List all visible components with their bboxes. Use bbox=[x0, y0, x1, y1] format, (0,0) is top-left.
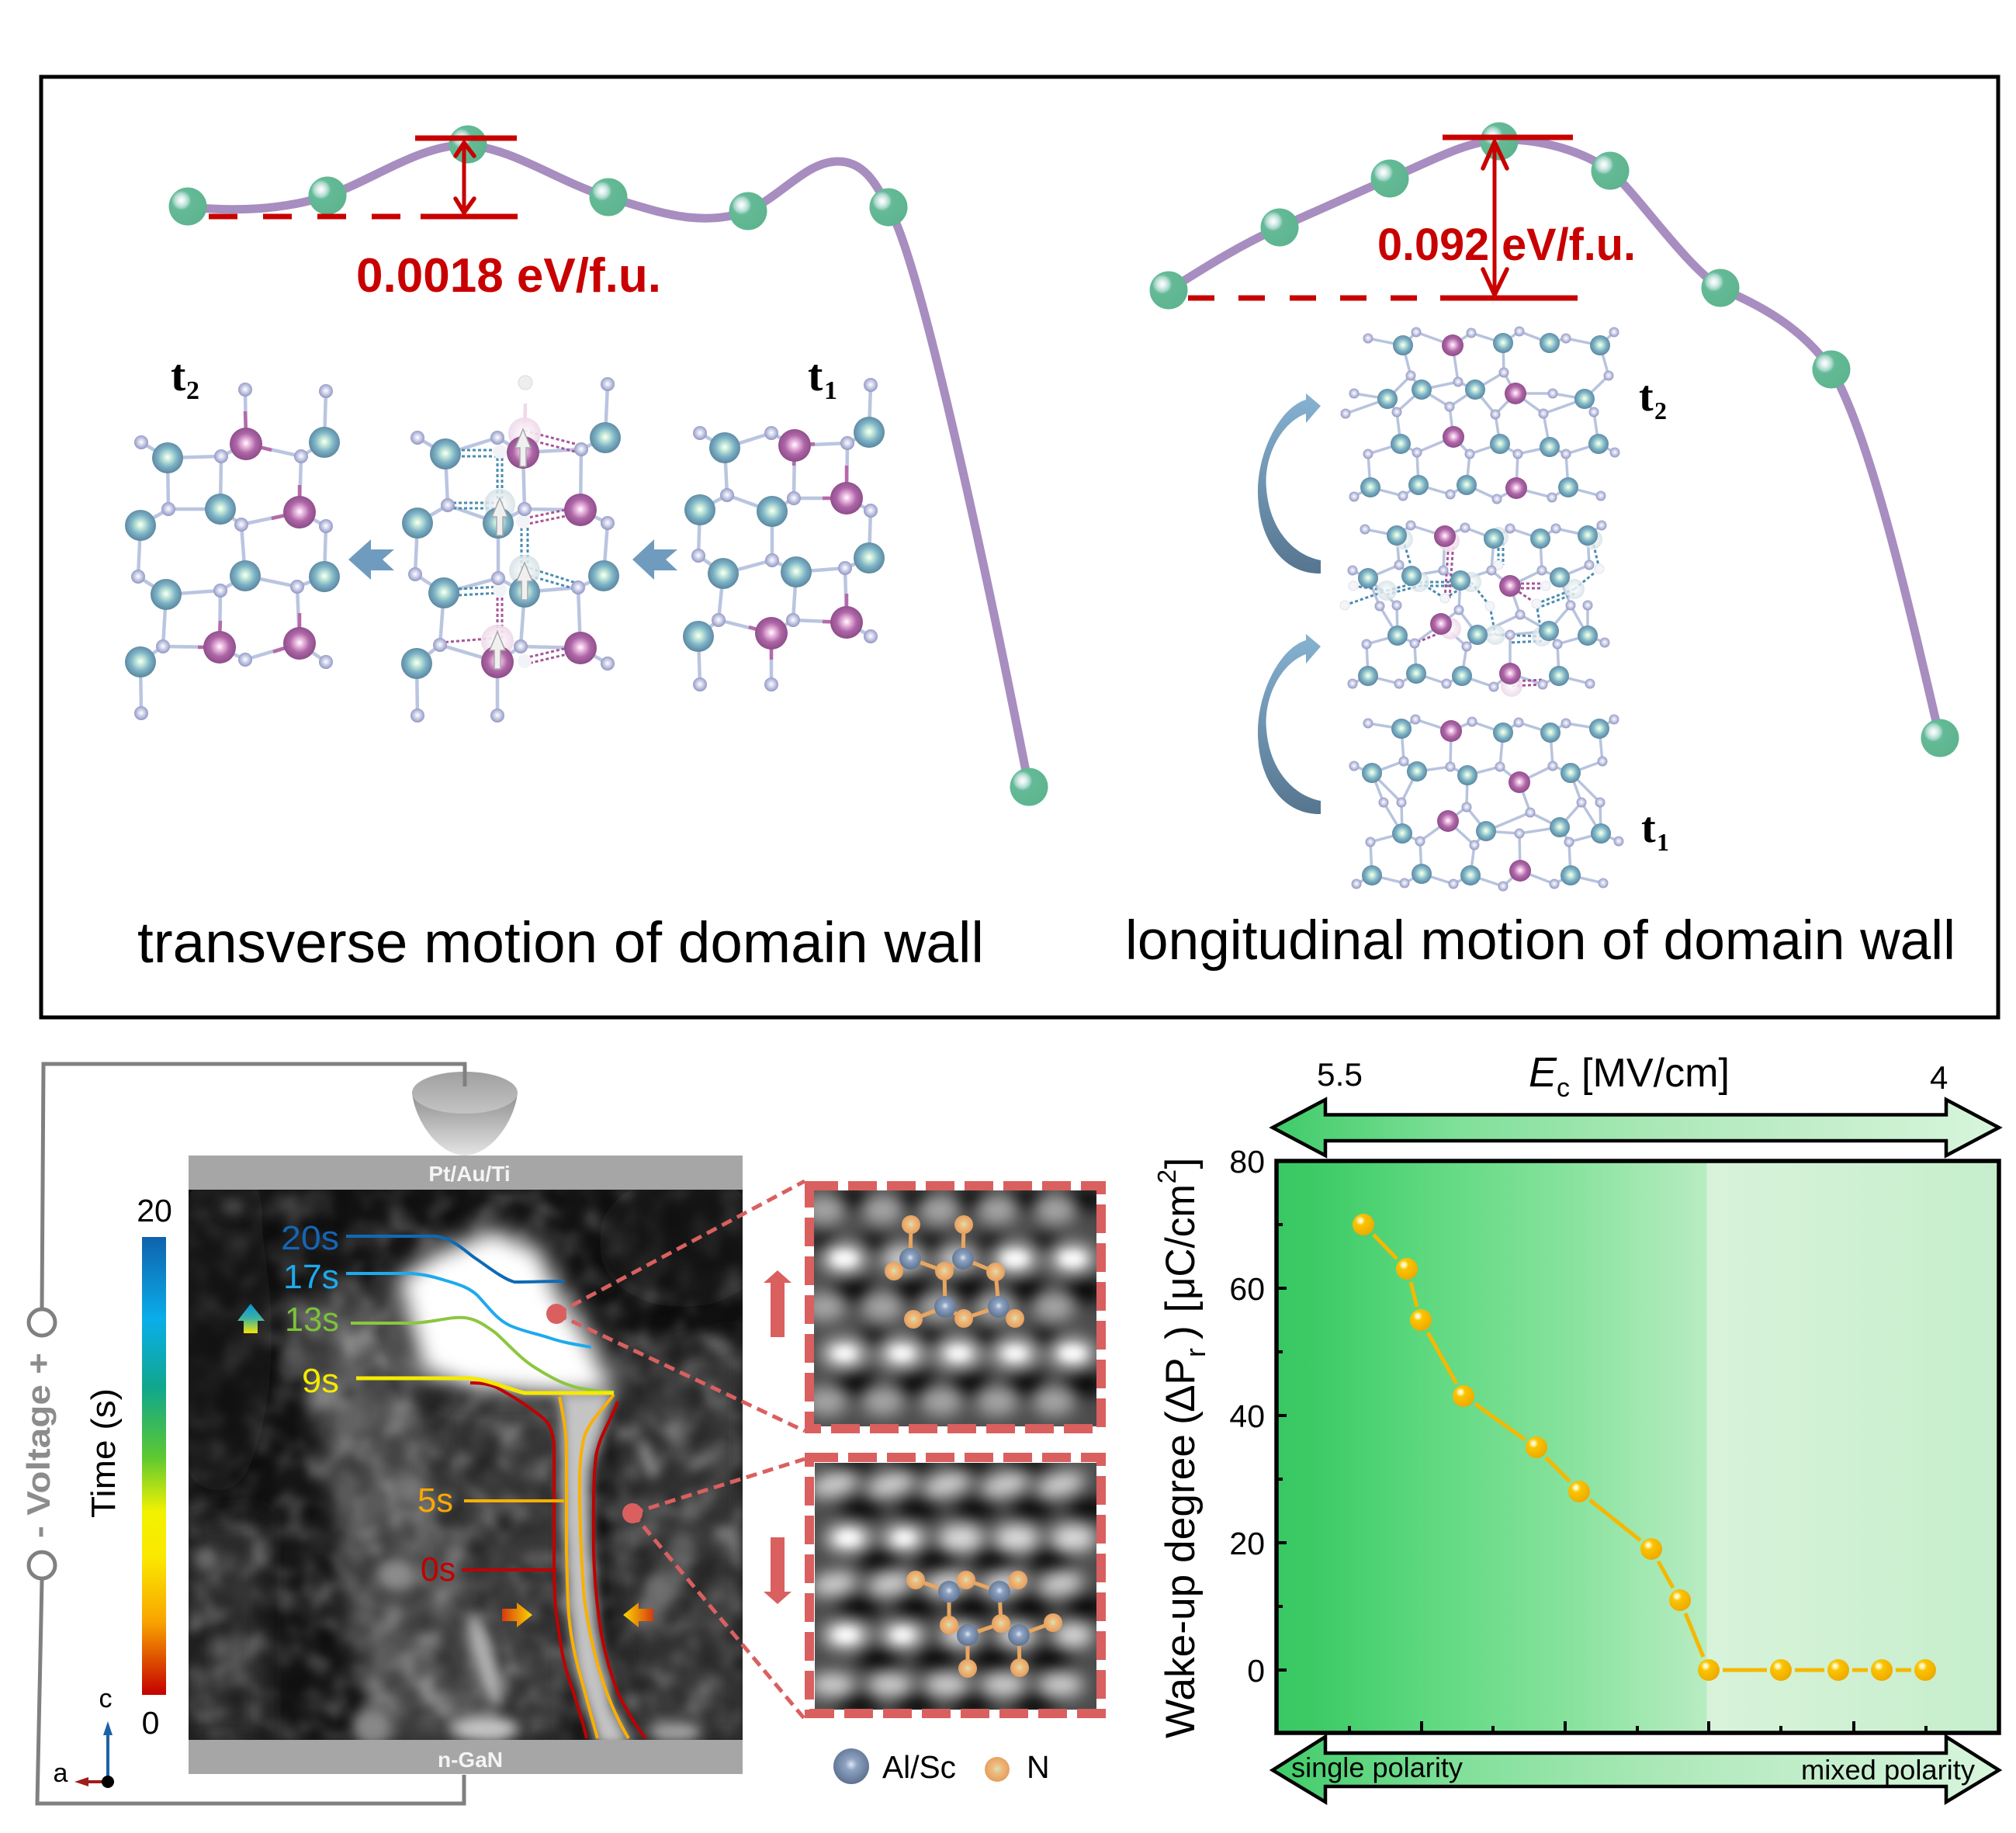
structure: t2 longitudinal bbox=[1341, 326, 1620, 504]
structure: t1 longitudinal bbox=[1349, 714, 1623, 891]
y-axis title: Δ bbox=[1158, 1384, 1204, 1412]
y-axis title: ] bbox=[1158, 1158, 1204, 1169]
arrow: t1 to transition state to t2 (right) bbox=[632, 539, 677, 580]
label: t1 right: t bbox=[1641, 804, 1656, 852]
probe tip bowl bbox=[412, 1070, 518, 1156]
y-axis tick labels: 80 bbox=[1229, 1144, 1265, 1180]
barrier marker: 0.092 eV/f.u. bbox=[1188, 137, 1636, 298]
bottom arrow: polarity: single polarity bbox=[1291, 1752, 1463, 1783]
color bar: time: 20 bbox=[137, 1193, 172, 1228]
polarization arrow: down bbox=[764, 1537, 792, 1604]
y-axis title: 2 bbox=[1152, 1169, 1181, 1183]
crystal axes bbox=[54, 1684, 114, 1788]
label: t1 right bbox=[1641, 804, 1669, 856]
label: voltage: - Voltage + bbox=[20, 1353, 57, 1538]
y-axis title bbox=[1152, 1158, 1211, 1738]
panel: domain wall motion energy barriers bbox=[41, 77, 1998, 1017]
caption: transverse motion: transverse motion of domain wall bbox=[137, 910, 984, 975]
label: t2 right: 2 bbox=[1654, 397, 1667, 424]
top axis: coercive field arrow: 4 bbox=[1930, 1059, 1948, 1096]
barrier marker: 0.0018 eV/f.u.: 0.0018 eV/f.u. bbox=[356, 249, 661, 303]
arrow: wall moving right bbox=[502, 1603, 532, 1627]
energy curve: longitudinal motion bbox=[1150, 123, 1959, 757]
zoom callout: dark region bbox=[622, 1459, 805, 1719]
crystal axes: c bbox=[99, 1684, 112, 1713]
structure: transition state transverse bbox=[401, 376, 621, 722]
crystal axes: a bbox=[54, 1759, 68, 1788]
top axis: coercive field arrow: 5.5 bbox=[1317, 1056, 1363, 1093]
structure: transition state longitudinal bbox=[1340, 520, 1609, 697]
structure: t2 transverse bbox=[125, 383, 340, 720]
circuit wires and terminals bbox=[29, 1064, 465, 1804]
data series bbox=[1353, 1214, 1936, 1681]
top axis: coercive field arrow bbox=[1273, 1049, 1999, 1156]
wall trace: 20s bbox=[346, 1236, 564, 1282]
arrow: wall moving left bbox=[623, 1603, 653, 1627]
wall trace: 17s bbox=[346, 1273, 591, 1347]
label: t2 right bbox=[1639, 372, 1667, 424]
barrier marker: 0.0018 eV/f.u. bbox=[209, 138, 661, 303]
label: t2 left: t bbox=[171, 350, 186, 400]
label: 5s: 5s bbox=[417, 1481, 453, 1519]
y-axis title: P bbox=[1158, 1357, 1204, 1385]
atom model overlay: upper bbox=[885, 1215, 1024, 1329]
y-axis tick labels: 0 bbox=[1247, 1653, 1265, 1689]
y-axis tick labels bbox=[1229, 1144, 1265, 1689]
arrow: upward growth bbox=[237, 1304, 265, 1333]
plot area with gradient bbox=[1276, 1161, 1999, 1733]
atomic-resolution image: upper bbox=[803, 1186, 1104, 1429]
y-axis tick labels: 40 bbox=[1229, 1398, 1265, 1434]
label: 0s: 0s bbox=[421, 1551, 456, 1589]
label: 20s: 20s bbox=[281, 1219, 339, 1257]
y-axis title: ( bbox=[1158, 1411, 1204, 1425]
top electrode: Pt/Au/Ti bbox=[189, 1156, 743, 1190]
wall trace: 0s bbox=[462, 1383, 646, 1738]
curved arrow: lower bbox=[1258, 634, 1321, 814]
legend: atoms: Al/Sc bbox=[882, 1749, 956, 1785]
label: 17s: 17s bbox=[283, 1258, 339, 1296]
label: t2 left bbox=[171, 350, 199, 405]
top axis: coercive field arrow: E bbox=[1529, 1049, 1557, 1096]
microscopy image with domain wall traces bbox=[189, 1190, 743, 1740]
label: t1 left: 1 bbox=[824, 376, 837, 405]
bottom arrow: polarity: mixed polarity bbox=[1801, 1754, 1975, 1786]
y-axis tick labels: 20 bbox=[1229, 1526, 1265, 1561]
label: t1 right: 1 bbox=[1657, 828, 1669, 856]
legend: atoms bbox=[833, 1748, 1050, 1785]
y-axis title: Wake-up degree bbox=[1158, 1434, 1204, 1738]
panel: wake-up degree chart bbox=[1152, 1049, 1999, 1802]
grayscale micrograph bbox=[189, 1190, 743, 1740]
y-axis tick labels: 60 bbox=[1229, 1271, 1265, 1307]
label: t1 left bbox=[808, 350, 837, 405]
zoom callout: bright region bbox=[546, 1181, 805, 1431]
y-axis title: [ bbox=[1158, 1301, 1204, 1312]
bottom electrode: n-GaN bbox=[189, 1740, 743, 1774]
y-axis title: r bbox=[1179, 1348, 1211, 1357]
bottom arrow: polarity bbox=[1273, 1737, 1999, 1802]
polarization arrow: up bbox=[764, 1270, 792, 1337]
legend: atoms: N bbox=[1027, 1749, 1050, 1785]
color bar: time: Time (s) bbox=[85, 1388, 123, 1518]
y-axis title: μC/cm bbox=[1158, 1184, 1204, 1300]
bottom electrode: n-GaN: n-GaN bbox=[438, 1748, 503, 1772]
wall trace: 13s bbox=[351, 1318, 614, 1392]
top electrode: Pt/Au/Ti: Pt/Au/Ti bbox=[428, 1162, 511, 1186]
curved arrow: upper bbox=[1258, 393, 1321, 573]
color bar: time: 0 bbox=[142, 1705, 159, 1741]
atom model overlay: lower bbox=[906, 1571, 1062, 1678]
wall trace: 5s bbox=[464, 1395, 629, 1738]
label: 9s: 9s bbox=[302, 1362, 339, 1400]
wall trace: 9s bbox=[356, 1378, 614, 1393]
barrier marker: 0.092 eV/f.u.: 0.092 eV/f.u. bbox=[1377, 220, 1636, 270]
top axis: coercive field arrow: [MV/cm] bbox=[1581, 1051, 1730, 1096]
label: t1 left: t bbox=[808, 350, 823, 400]
structure: t1 transverse bbox=[683, 378, 885, 691]
panel: in-situ device and domain wall image bbox=[20, 1064, 1110, 1804]
atomic-resolution image: lower bbox=[807, 1455, 1110, 1714]
label: t2 left: 2 bbox=[186, 376, 199, 405]
label: t2 right: t bbox=[1639, 372, 1654, 421]
label: 13s: 13s bbox=[285, 1301, 339, 1339]
caption: longitudinal motion: longitudinal motion of domain wall bbox=[1125, 910, 1955, 972]
energy curve: transverse motion bbox=[169, 126, 1048, 806]
arrow: t1 to transition state to t2 (left) bbox=[348, 539, 394, 580]
color bar: time bbox=[85, 1193, 172, 1741]
y-axis title: ) bbox=[1158, 1325, 1204, 1339]
top axis: coercive field arrow: c bbox=[1557, 1073, 1570, 1103]
